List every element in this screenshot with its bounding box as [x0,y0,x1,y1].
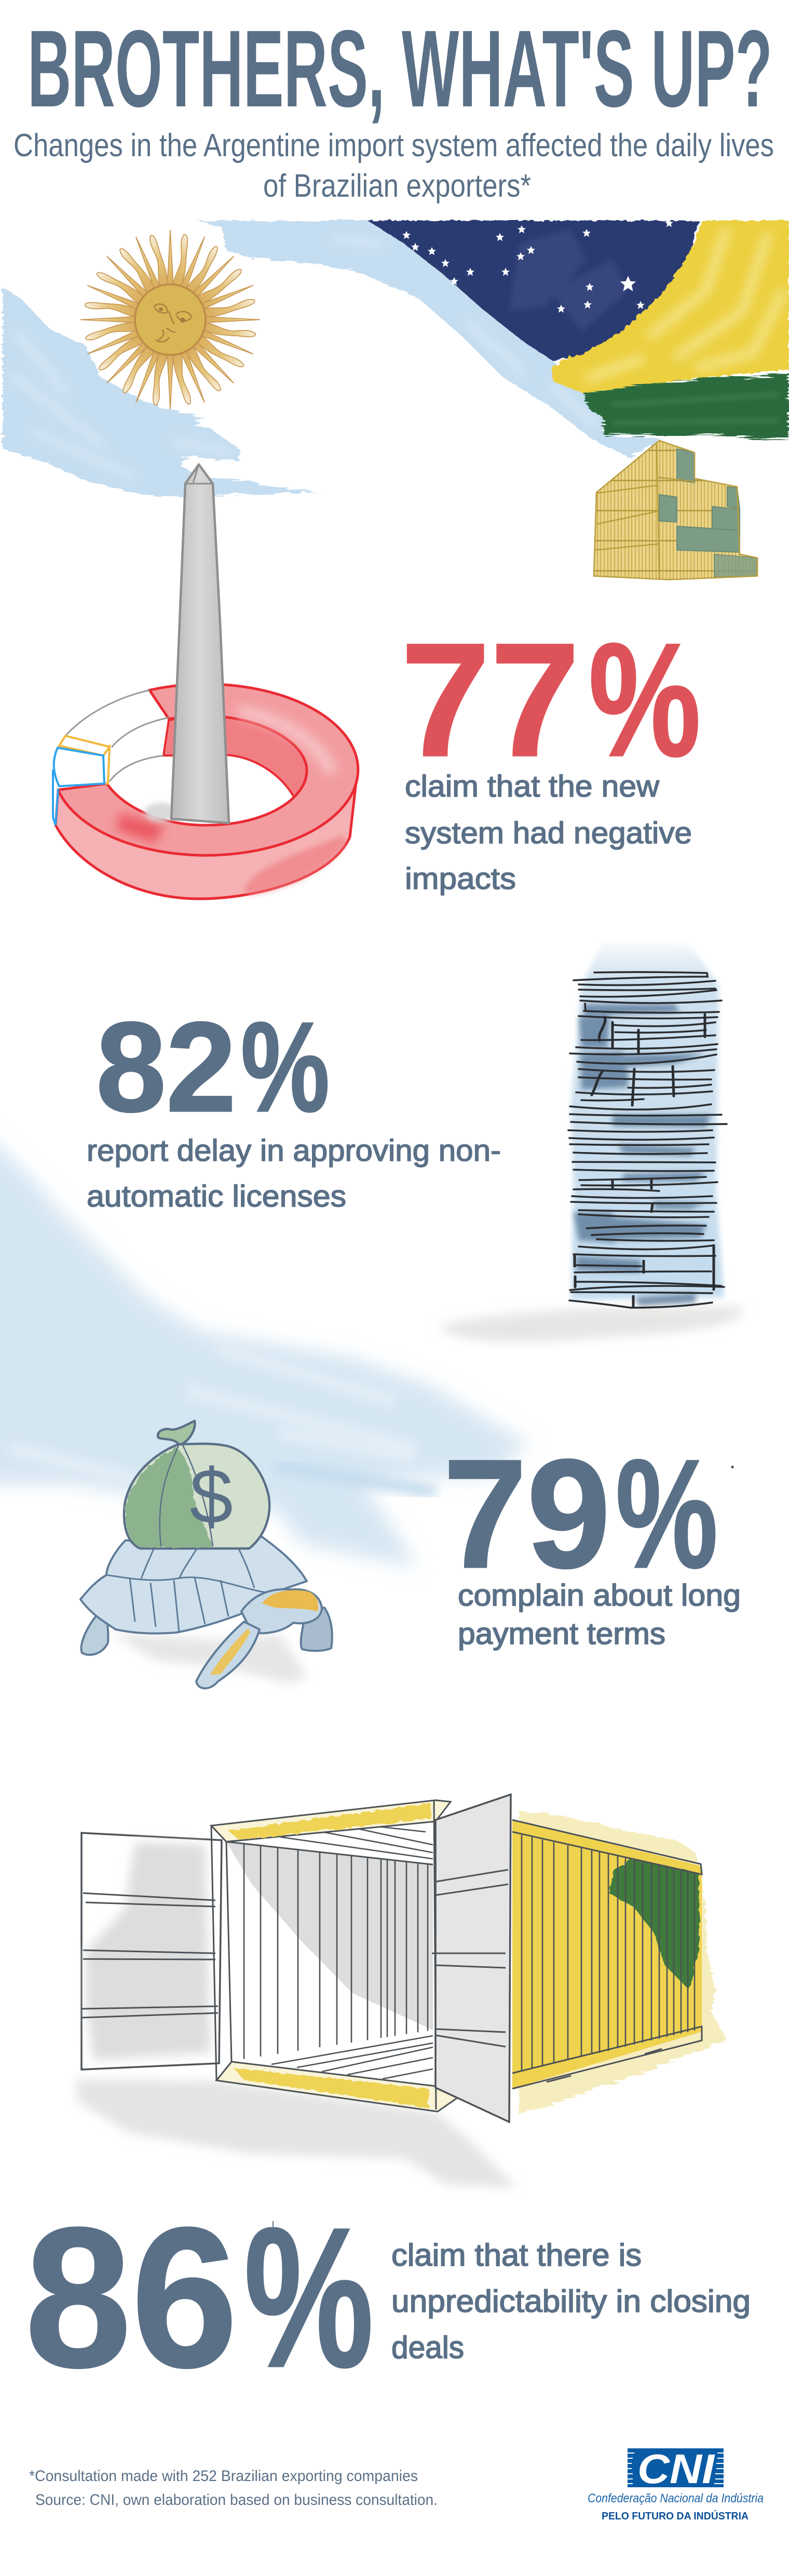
turtle ground shadow [111,1633,307,1684]
donut outer side wall [56,773,357,899]
stat caption 77: claim that the new [405,770,660,803]
icon: obelisk [171,464,229,823]
bottom beam yellow [216,2062,458,2112]
logo: CNI: CNI [637,2446,715,2492]
stat caption 86: unpredictability in closing [391,2284,751,2319]
paper sheets [568,972,727,1308]
top beam yellow [211,1800,451,1842]
stat: 77% [401,609,701,896]
floor [226,2030,433,2086]
stat caption 77: impacts [405,862,516,896]
stat caption 79: complain about long [458,1579,741,1612]
stat: 77%: % [589,609,701,790]
logo: CNI: Confederação Nacional da Indústria [588,2491,764,2505]
stat: 86%: % [244,2186,374,2409]
stat: 79%: % [616,1428,718,1600]
yellow wash around container [519,1811,727,2115]
front leg [196,1622,260,1689]
stat caption 82: automatic licenses [87,1180,346,1213]
icon: paper stack [438,942,743,1342]
left door [81,1833,222,2070]
stat caption 79 [458,1579,741,1651]
logo: CNI [588,2446,764,2522]
yellow slice [59,736,110,784]
stat caption 77 [405,770,692,896]
light blue band [194,221,664,457]
shadow in hole [144,803,178,821]
stat: 82%: 82 [96,996,236,1139]
stack shadow [438,1307,743,1342]
brazilian yellow [551,221,789,393]
navy sky with stars [368,219,699,361]
stat caption 79: payment terms [458,1617,665,1651]
yellow side wall [512,1820,702,2089]
icon: turtle carrying money bag: $ [189,1453,233,1540]
stat caption 77: system had negative [405,816,692,850]
stat caption 86: deals [391,2330,464,2365]
stat: 86%: 86 [25,2186,238,2409]
dark shading [574,1004,711,1306]
illustration: flags banner [3,219,789,497]
back leg [81,1616,108,1655]
donut top surface red [58,684,358,855]
interior back wall [226,1842,433,2062]
stat: 79% [443,1428,741,1651]
ceiling [280,1827,433,1859]
footnote and source: *Consultation made with 252 Brazilian exporting companies [29,2468,418,2485]
far front leg [301,1608,332,1651]
side wall corrugation [522,1835,695,2071]
brazilian green [583,373,789,439]
background blue brush wash [0,1127,528,1567]
stat: 82%: % [241,996,330,1139]
neck and head [241,1589,322,1633]
donut inner wall [164,716,307,798]
money bag [124,1421,269,1549]
stat caption 86 [391,2238,751,2365]
icon: sun of May [80,230,260,409]
shell [80,1537,307,1634]
subtitle: of Brazilian exporters* [263,168,531,204]
left post [211,1800,436,2109]
subtitle [13,128,774,204]
shell markings [106,1540,271,1632]
chart: 3D donut with 77% in red [53,684,358,899]
footnote and source: Source: CNI, own elaboration based on business consultation. [35,2491,438,2509]
icon: open shipping container [75,1794,727,2187]
white slice outline [65,690,169,782]
green map on container [609,1859,699,1990]
stat: 79%: 79 [443,1428,610,1600]
blue slice [53,748,104,825]
stat: 86% [25,2186,751,2409]
stat: 82% [87,996,501,1213]
right door [436,1794,511,2122]
stat caption 82 [87,1134,501,1213]
stat caption 86: claim that there is [391,2238,642,2272]
footnote and source [29,2468,438,2509]
green container tiles [659,449,757,577]
argentine flag stroke left [3,288,322,497]
stat caption 82: report delay in approving non- [87,1134,501,1168]
icon: turtle carrying money bag [80,1421,332,1689]
logo: CNI: PELO FUTURO DA INDÚSTRIA [602,2510,749,2522]
container ground shadow [75,2079,516,2187]
icon: stacked containers building [594,441,757,580]
paper wash [571,942,724,1300]
stat: 77%: 77 [401,609,580,790]
